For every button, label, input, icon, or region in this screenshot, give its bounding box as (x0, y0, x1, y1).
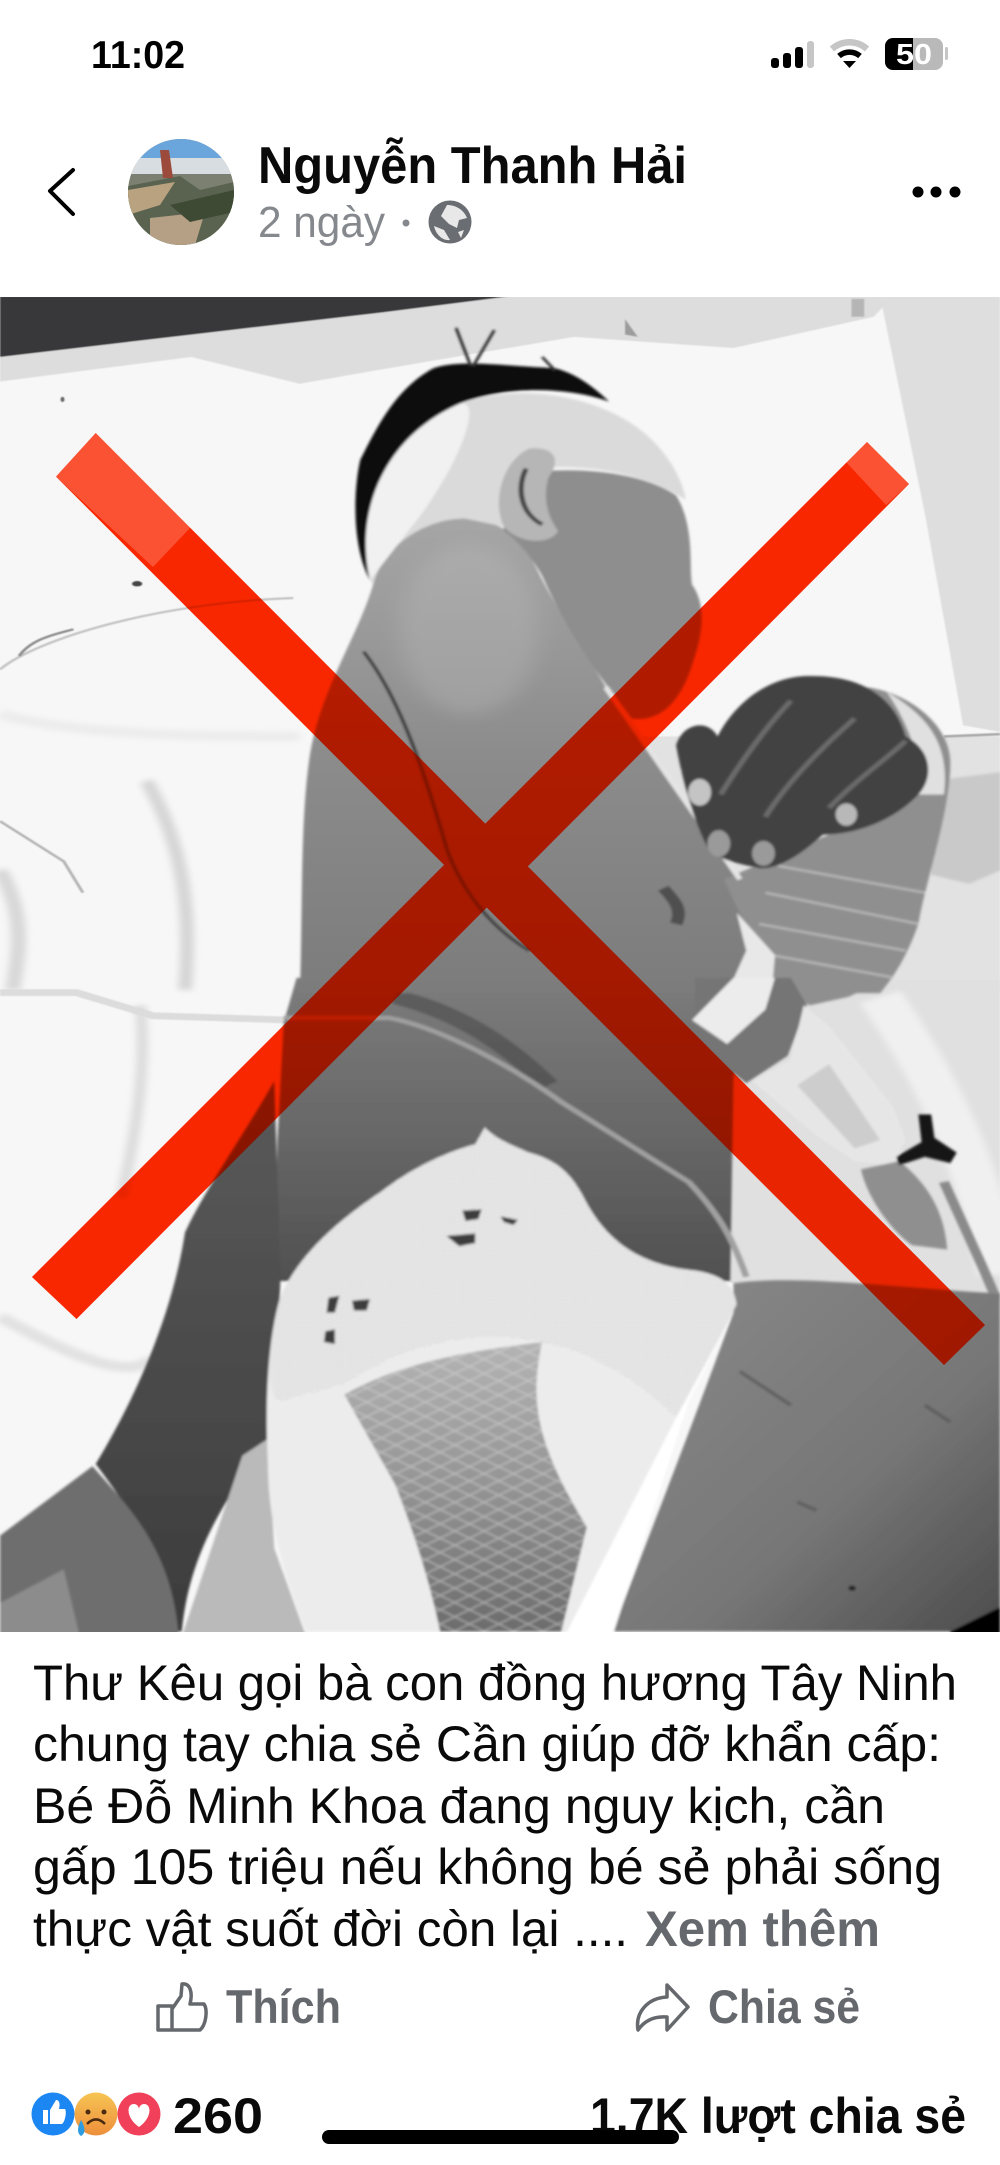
icon: signal strength (771, 41, 814, 68)
post caption: Xem thêm (645, 1901, 880, 1957)
icon: sad reaction (74, 2092, 118, 2136)
reactions and share count (32, 2088, 966, 2144)
photo: torso and arm (0, 328, 1000, 1637)
ear (499, 448, 558, 541)
photo: bed sheet background (0, 297, 1000, 1378)
photo: thigh (612, 1280, 1000, 1637)
reaction count: 260 (173, 2088, 263, 2144)
clock: 11:02 (91, 34, 185, 77)
photo: white gauze dressing (267, 1127, 737, 1637)
hair (355, 364, 609, 580)
status bar (91, 34, 948, 77)
post caption: Thư Kêu gọi bà con đồng hương Tây Ninh (33, 1655, 957, 1711)
post caption: thực vật suốt đời còn lại .... (33, 1901, 628, 1957)
icon: wifi (832, 42, 867, 68)
icon: love reaction (118, 2092, 160, 2136)
photo: bandaged hand (606, 676, 1000, 993)
photo: pad under dressing (182, 1439, 306, 1637)
share label: Chia sẻ (708, 1980, 860, 2033)
icon: battery 50: 50 (896, 39, 932, 71)
face (504, 470, 702, 719)
icon: globe (428, 200, 472, 244)
photo: head (355, 328, 702, 719)
icon: battery 50 (885, 38, 948, 71)
red X mark (32, 433, 985, 1365)
photo: forearm and IV dressing (692, 978, 995, 1296)
action row (158, 1980, 860, 2033)
head bandage (365, 393, 686, 585)
icon: like thumb (158, 1984, 206, 2030)
post caption: gấp 105 triệu nếu không bé sẻ phải sống (33, 1839, 942, 1895)
icon: back chevron (50, 170, 73, 214)
author name: Nguyễn Thanh Hải (258, 137, 687, 195)
share count: 1.7K lượt chia sẻ (590, 2088, 966, 2144)
panel: post photo with red X (0, 296, 1000, 1637)
post caption: chung tay chia sẻ Cần giúp đỡ khẩn cấp: (33, 1716, 941, 1772)
post caption: Bé Đỗ Minh Khoa đang nguy kịch, cần (33, 1778, 885, 1834)
like label: Thích (226, 1980, 341, 2033)
icon: more menu dots (912, 186, 960, 198)
photo: grey shirt (0, 1466, 179, 1637)
separator dot (402, 220, 410, 226)
avatar (128, 139, 234, 245)
icon: like reaction (32, 2092, 74, 2136)
post header (50, 137, 960, 247)
home indicator (322, 2130, 679, 2144)
photo: wristband (732, 912, 776, 980)
post caption (33, 1655, 957, 1957)
post time: 2 ngày (258, 198, 385, 247)
icon: share arrow (638, 1985, 688, 2030)
